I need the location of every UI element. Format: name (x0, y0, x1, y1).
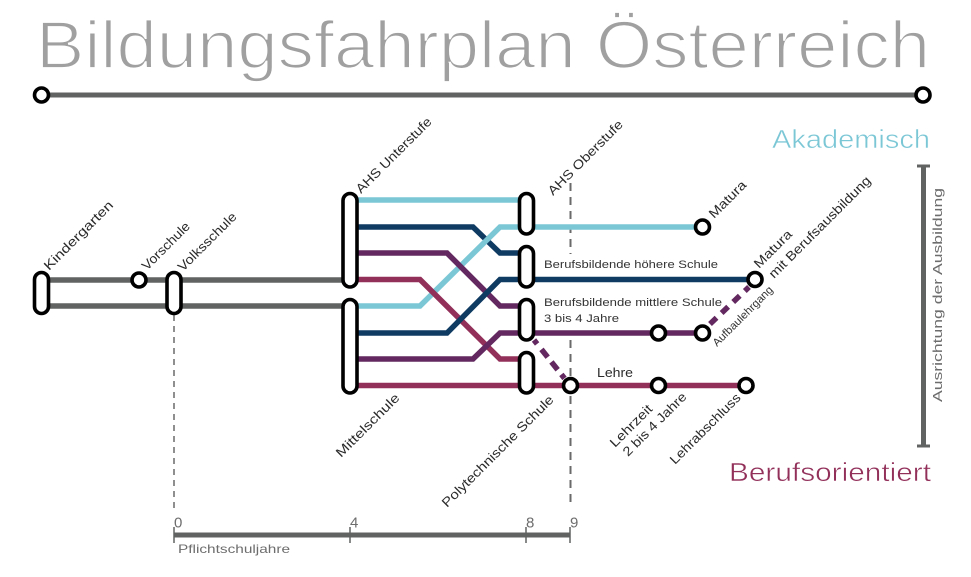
heading: Akademisch: Akademisch (772, 124, 930, 154)
label: Matura mit Berufsausbildung: mit Berufsausbildung (766, 173, 874, 281)
stations: circles (132, 220, 762, 392)
compulsory years axis: 0 (174, 514, 182, 532)
label: Lehre: Lehre (597, 365, 633, 380)
compulsory years axis: 4 (350, 514, 358, 532)
compulsory years axis: 8 (526, 514, 534, 532)
label: Vorschule: Vorschule (139, 219, 193, 273)
label: Berufsbildende mittlere Schule: Berufsbildende mittlere Schule (544, 297, 722, 309)
label: AHS Unterstufe: AHS Unterstufe (353, 114, 435, 196)
compulsory years axis (174, 514, 578, 543)
label: Lehrzeit 2 bis 4 Jahre (607, 389, 690, 459)
scale label: Ausrichtung der Ausbildung (931, 188, 945, 402)
label: Matura: Matura (706, 177, 750, 221)
title: Bildungsfahrplan Österreich (36, 8, 930, 83)
grey lines: early education (41, 280, 350, 306)
label: Aufbaulehrgang: Aufbaulehrgang (711, 284, 776, 349)
dashed guide lines (174, 183, 570, 508)
label: Berufsbildende höhere Schule: Berufsbildende höhere Schule (544, 259, 718, 271)
label: Lehrzeit 2 bis 4 Jahre: 2 bis 4 Jahre (620, 389, 690, 459)
label: Berufsbildende mittlere Schule (544, 297, 722, 325)
label: Mittelschule: Mittelschule (333, 390, 403, 460)
dashed purple transitions (534, 287, 749, 379)
compulsory years axis: 9 (570, 514, 578, 532)
stations: pills (34, 194, 534, 393)
label: Volksschule: Volksschule (175, 209, 240, 274)
axis label: Pflichtschuljahre (178, 542, 290, 556)
label: Kindergarten: Kindergarten (41, 197, 116, 273)
label: AHS Oberstufe: AHS Oberstufe (545, 117, 626, 198)
label: Polytechnische Schule: Polytechnische Schule (439, 392, 557, 510)
label: Lehrabschluss: Lehrabschluss (667, 390, 744, 467)
orientation scale (917, 165, 930, 447)
title rule with end stops (34, 88, 930, 102)
label: Matura mit Berufsausbildung (751, 173, 874, 281)
label: Matura mit Berufsausbildung: Matura (751, 226, 796, 271)
heading: Berufsorientiert: Berufsorientiert (729, 457, 932, 487)
label: Lehrzeit 2 bis 4 Jahre: Lehrzeit (607, 401, 656, 450)
label: Berufsbildende mittlere Schule: 3 bis 4 Jahre (544, 313, 619, 325)
route lines (350, 200, 755, 386)
